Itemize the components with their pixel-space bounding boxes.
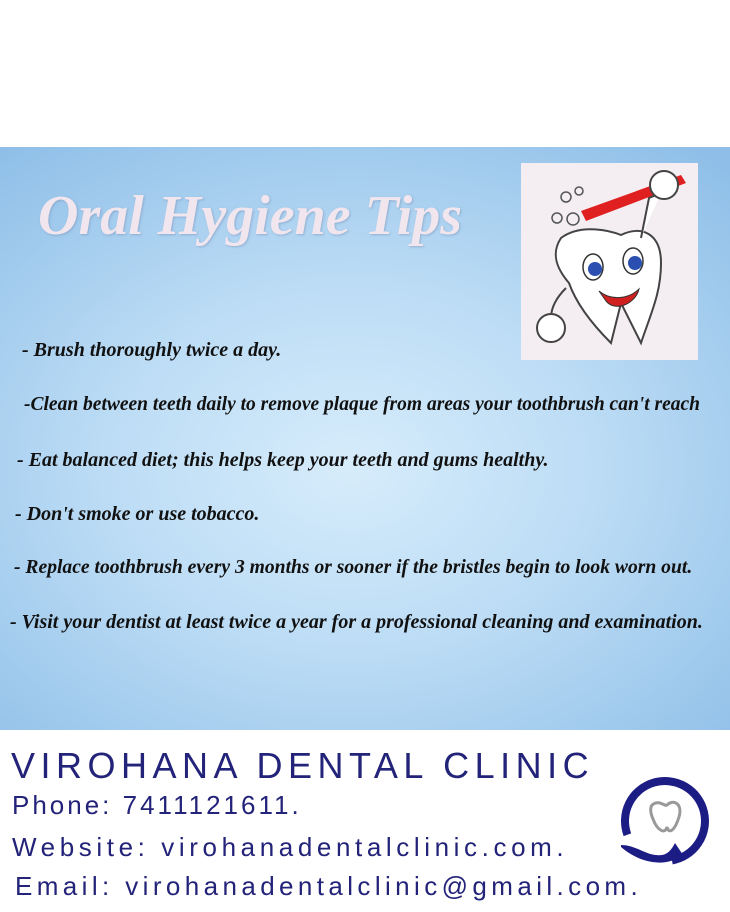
tip 2: -Clean between teeth daily to remove plaque from areas your toothbrush can't reach bbox=[24, 394, 700, 415]
phone: Phone: 7411121611. bbox=[12, 790, 302, 820]
clinic name: VIROHANA DENTAL CLINIC bbox=[11, 745, 594, 786]
tip 5: - Replace toothbrush every 3 months or sooner if the bristles begin to look worn out. bbox=[14, 557, 692, 578]
website: Website: virohanadentalclinic.com. bbox=[12, 832, 568, 862]
tip 4: - Don't smoke or use tobacco. bbox=[15, 503, 259, 525]
tip 1: - Brush thoroughly twice a day. bbox=[22, 339, 281, 361]
panel: tips background bbox=[0, 147, 730, 730]
email: Email: virohanadentalclinic@gmail.com. bbox=[15, 871, 642, 901]
icon: clinic logo bbox=[621, 777, 709, 864]
icon: tooth cartoon bbox=[521, 163, 698, 360]
tip 3: - Eat balanced diet; this helps keep your teeth and gums healthy. bbox=[17, 449, 548, 471]
tip 6: - Visit your dentist at least twice a year for a professional cleaning and examination. bbox=[10, 611, 703, 633]
title: Oral Hygiene Tips bbox=[38, 185, 462, 247]
